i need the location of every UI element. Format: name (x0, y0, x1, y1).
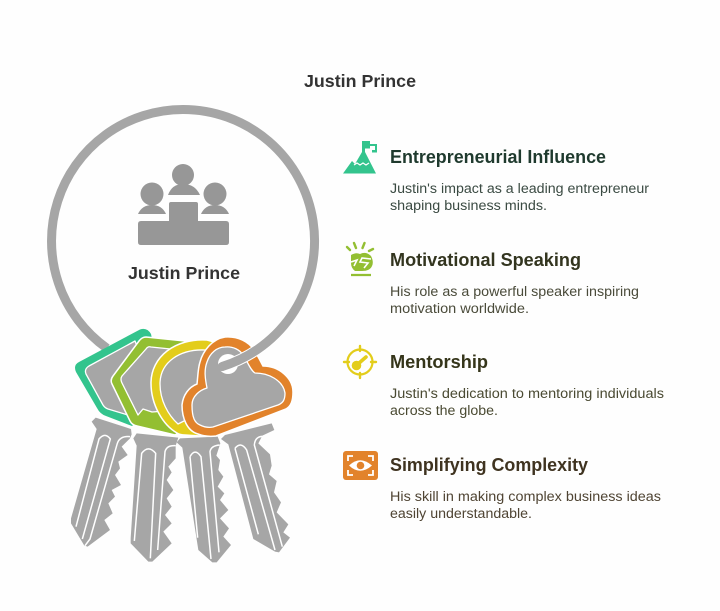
heading: Entrepreneurial Influence (390, 147, 606, 167)
description: Justin's impact as a leading entrepreneur (390, 181, 650, 196)
tag: yellow circle (151, 340, 230, 436)
description: His role as a powerful speaker inspiring (390, 284, 639, 299)
key 3 (177, 437, 231, 562)
icon: mountain with flag (343, 141, 377, 174)
icon: target with key (344, 346, 376, 378)
heading: Mentorship (390, 352, 488, 372)
description: His skill in making complex business ideas (390, 489, 661, 504)
tag: lime hexagon (111, 337, 200, 435)
description: easily understandable. (390, 506, 532, 521)
description: shaping business minds. (390, 198, 547, 213)
title: Justin Prince (304, 71, 416, 91)
description: motivation worldwide. (390, 301, 529, 316)
keys 3 and 4 (177, 423, 290, 562)
ring: back arc (52, 110, 183, 348)
description: Justin's dedication to mentoring individuals (390, 386, 664, 401)
tag: orange cloud (182, 337, 293, 436)
item: Simplifying Complexity (343, 451, 661, 521)
key ring graphic (52, 109, 315, 562)
heading: Motivational Speaking (390, 250, 581, 270)
icon: fist burst (347, 243, 373, 275)
item: Motivational Speaking (347, 243, 639, 316)
tag: green pentagon (75, 329, 165, 426)
item: Entrepreneurial Influence (343, 141, 650, 213)
key 1 (71, 418, 132, 547)
icon: eye in frame (343, 451, 378, 480)
heading: Simplifying Complexity (390, 455, 588, 475)
key 2 (131, 433, 178, 562)
item: Mentorship (344, 346, 664, 418)
icon: people on podium (138, 164, 229, 245)
ring: front arc (183, 109, 315, 371)
key 4 (221, 423, 290, 552)
ring label: Justin Prince (128, 263, 240, 283)
keys 1 and 2 (71, 418, 178, 562)
description: across the globe. (390, 403, 498, 418)
